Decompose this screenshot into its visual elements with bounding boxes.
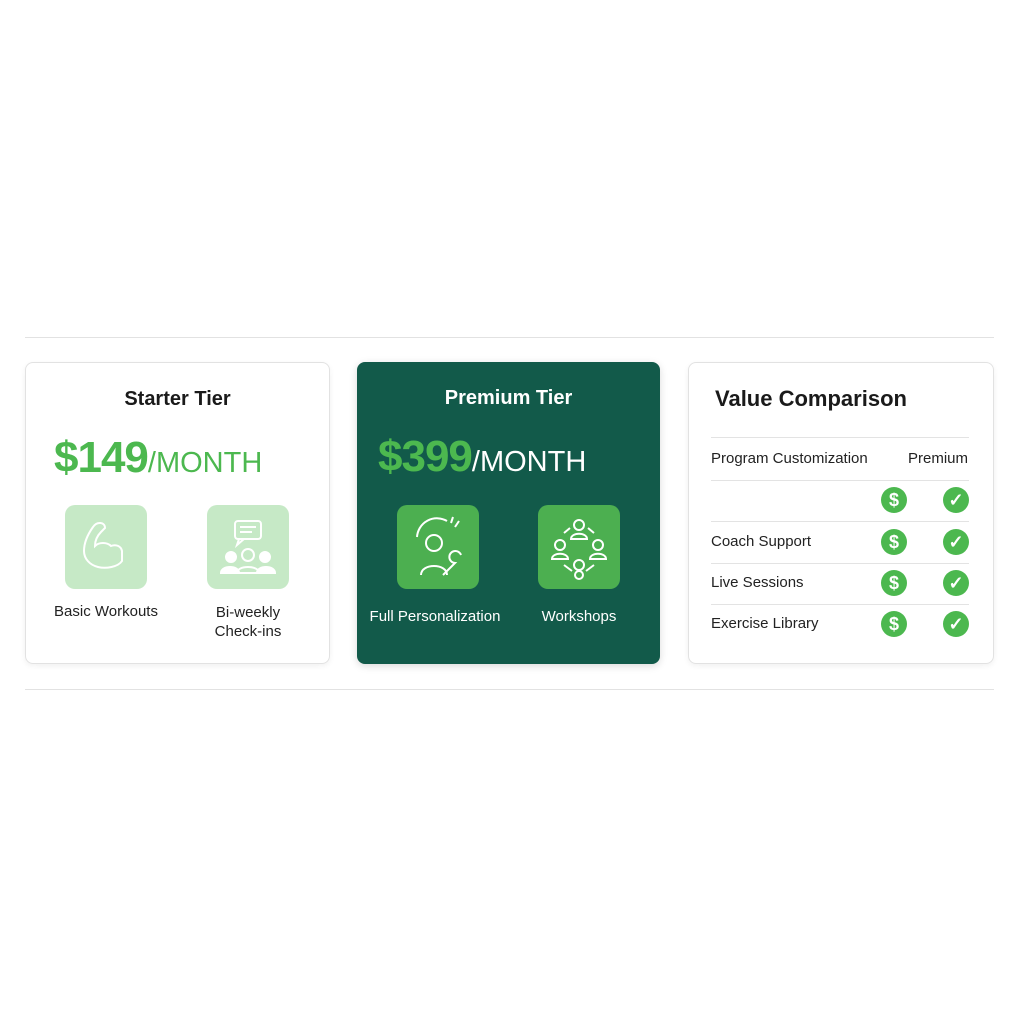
label: bi-weekly check-ins: Bi-weekly (216, 604, 280, 621)
label: bi-weekly check-ins: Check-ins (215, 623, 281, 640)
row icons 3: $ (889, 573, 899, 593)
row icons 1: ✓ (948, 490, 964, 510)
label: full personalization: Full Personalization (370, 608, 500, 625)
row icons 3: ✓ (948, 573, 964, 593)
heading: value comparison: Value Comparison (715, 386, 907, 411)
label: bi-weekly check-ins (215, 604, 281, 640)
row icons 2: $ (889, 532, 899, 552)
row icons 2: ✓ (948, 532, 964, 552)
row: live sessions: Live Sessions (711, 574, 804, 591)
table header: Premium (908, 450, 968, 467)
panel: value comparison (688, 362, 994, 664)
icon: check-ins group (207, 505, 289, 589)
label: basic workouts: Basic Workouts (54, 603, 158, 620)
row icons 4 (881, 611, 969, 637)
row icons 2 (881, 529, 969, 555)
row: coach support: Coach Support (711, 533, 811, 550)
row icons 4: ✓ (948, 614, 964, 634)
panel: premium tier (357, 362, 660, 664)
row icons 1 (881, 487, 969, 513)
row icons 1: $ (889, 490, 899, 510)
row icons 4: $ (889, 614, 899, 634)
price: starter: $149/MONTH (54, 433, 262, 482)
icon: personalization (397, 505, 479, 589)
row: exercise library: Exercise Library (711, 615, 819, 632)
table header: Program Customization (711, 450, 868, 467)
icon: workshops (538, 505, 620, 589)
heading: starter tier: Starter Tier (124, 388, 231, 410)
row icons 3 (881, 570, 969, 596)
panel: starter tier (25, 362, 330, 664)
icon: flexed arm (65, 505, 147, 589)
price: premium: $399/MONTH (378, 432, 586, 481)
label: workshops: Workshops (542, 608, 616, 625)
table header (711, 450, 968, 467)
heading: premium tier: Premium Tier (445, 387, 572, 409)
